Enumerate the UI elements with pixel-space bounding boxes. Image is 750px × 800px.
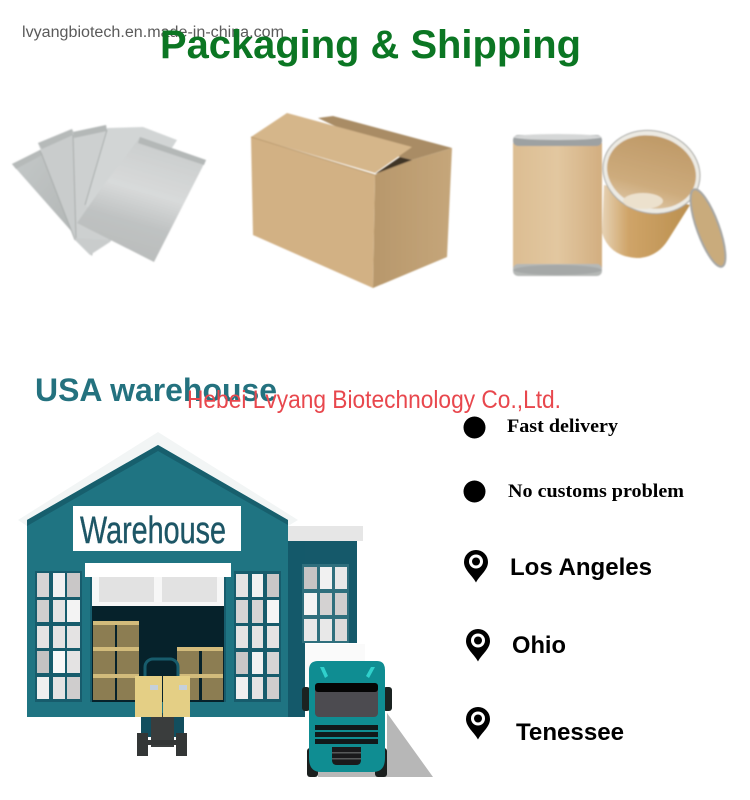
bullet: fast delivery [464, 416, 619, 438]
panel: packaging photos [12, 113, 732, 288]
bullet: no customs problem [464, 480, 685, 502]
road [318, 713, 433, 777]
side annex [288, 526, 363, 717]
stacked cartons [93, 621, 223, 700]
location: Ohio [466, 629, 566, 662]
title: Packaging & Shipping [160, 23, 581, 67]
photo: foil pouches [12, 125, 206, 262]
panel: warehouse locations [464, 550, 652, 746]
truck [302, 661, 392, 777]
photo: fiber drums [513, 120, 732, 276]
loading bay floor [305, 644, 365, 684]
building body [27, 445, 288, 717]
bullet: fast delivery: Fast delivery [507, 417, 619, 437]
heading: USA warehouse: USA warehouse [35, 372, 277, 408]
panel: benefits [464, 416, 685, 502]
watermark: company name: Hebei Lvyang Biotechnology Co.,Ltd. [187, 386, 561, 414]
photo: cardboard box [251, 113, 452, 288]
loading door [85, 563, 231, 702]
right windows [234, 571, 281, 702]
watermark: website: lvyangbiotech.en.made-in-china.com [22, 24, 284, 41]
illustration: warehouse [18, 432, 433, 777]
location: Ohio: Ohio [512, 632, 566, 659]
sign: Warehouse [80, 510, 226, 552]
location: Tenessee [466, 707, 624, 746]
location: Los Angeles [464, 550, 652, 582]
location: Tenessee: Tenessee [516, 719, 624, 746]
hand truck with boxes [135, 659, 190, 756]
bullet: no customs problem: No customs problem [508, 482, 685, 502]
left windows [35, 571, 82, 702]
location: Los Angeles: Los Angeles [510, 554, 652, 581]
